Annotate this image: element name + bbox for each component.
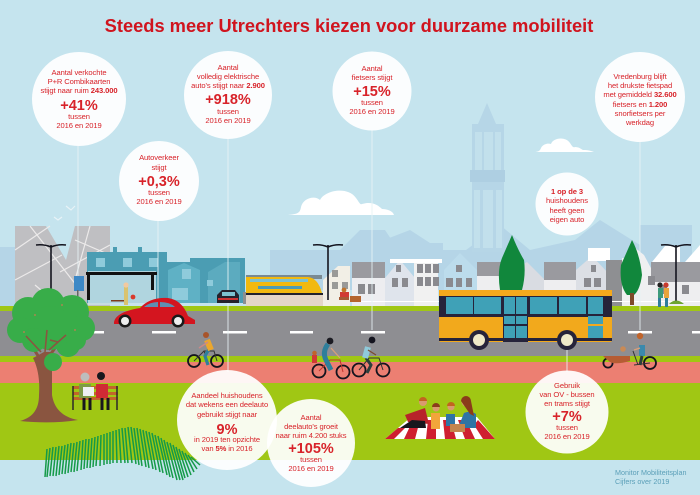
bubble: P+R: tussen — [68, 112, 90, 121]
people on right sidewalk — [657, 282, 669, 307]
bubble: Vredenburg: met gemiddeld 32.600 — [603, 90, 677, 99]
white and grey town houses — [323, 245, 700, 306]
trees behind road — [499, 235, 642, 305]
bubble: Vredenburg: Vredenburg blijft — [613, 72, 668, 81]
bubble: deelauto's: naar ruim 4.200 stuks — [276, 431, 347, 440]
bubble: P+R: stijgt naar ruim 243.000 — [41, 86, 117, 95]
bubble: 1 op de 3 — [536, 172, 598, 236]
bubble: 1 op de 3: huishoudens — [546, 196, 588, 205]
bubble: fietsers: Aantal — [362, 64, 383, 73]
bubble: autoverkeer: Autoverkeer — [139, 153, 179, 162]
title: Steeds meer Utrechters kiezen voor duurzame mobiliteit — [105, 15, 593, 36]
bubble: Vredenburg: het drukste fietspad — [608, 81, 672, 90]
bubble: Vredenburg: werkdag — [625, 118, 654, 127]
bubble: deelauto huishoudens: in 2019 ten opzichte — [194, 435, 260, 444]
cargo bike — [603, 333, 656, 369]
bubble: autoverkeer: stijgt — [151, 163, 167, 172]
bubble: elektrische auto's: volledig elektrische — [197, 72, 259, 81]
ground strip — [0, 306, 700, 311]
bubble: OV — [526, 370, 608, 454]
birds — [54, 206, 75, 220]
bubble: OV: Gebruik — [554, 381, 580, 390]
grey office blocks — [15, 226, 110, 306]
clouds — [288, 139, 594, 215]
footer note: Cijfers over 2019 — [615, 477, 669, 486]
bubble: elektrische auto's: auto's stijgt naar 2.900 — [191, 81, 265, 90]
bubble: deelauto huishoudens: gebruikt stijgt naar — [197, 410, 258, 419]
train — [246, 275, 324, 295]
street lamps — [36, 245, 691, 302]
bubble: autoverkeer: 2016 en 2019 — [136, 197, 182, 206]
bubble: 1 op de 3: heeft geen — [550, 206, 584, 215]
bubble: fietsers — [332, 52, 412, 130]
bubble: deelauto's: deelauto's groeit — [284, 422, 339, 431]
footer note — [615, 468, 687, 486]
bubble: elektrische auto's — [184, 51, 272, 139]
bubble: OV: tussen — [556, 423, 578, 432]
skyline: distant roofs — [0, 220, 692, 306]
bubble: deelauto's: tussen — [300, 455, 322, 464]
bubble: OV: en trams stijgt — [544, 399, 591, 408]
bubble: P+R: P+R Combikaarten — [48, 77, 110, 86]
bubble: Vredenburg: fietsers en 1.200 — [613, 100, 667, 109]
bubble: deelauto's: Aantal — [301, 413, 322, 422]
bus shelter — [74, 272, 157, 305]
bubble: P+R: 2016 en 2019 — [56, 121, 102, 130]
cyclist 3 — [352, 337, 390, 376]
big tree — [7, 288, 95, 422]
platform — [246, 295, 324, 306]
bubble: deelauto huishoudens: 9% — [217, 422, 238, 438]
bubble: deelauto's — [267, 399, 355, 487]
bubble: fietsers: +15% — [353, 84, 391, 100]
road — [0, 311, 700, 356]
bubble: fietsers: 2016 en 2019 — [349, 107, 395, 116]
bubble: deelauto huishoudens: dat wekens een deelauto — [186, 400, 268, 409]
cyclist 2: mother with child — [312, 338, 350, 378]
shrub — [669, 300, 684, 304]
bubble: fietsers: tussen — [361, 98, 383, 107]
skyline: Dom tower silhouette — [470, 103, 505, 252]
bubble: elektrische auto's: Aantal — [218, 63, 239, 72]
grass tuft — [45, 427, 200, 480]
lawn — [0, 383, 700, 460]
bubble: P+R: +41% — [60, 98, 98, 114]
footer note: Monitor Mobiliteitsplan — [615, 468, 687, 477]
bubble: OV: +7% — [552, 409, 582, 425]
red car — [114, 298, 195, 328]
bubble: deelauto huishoudens: van 5% in 2016 — [202, 444, 252, 453]
bubble: OV: 2016 en 2019 — [544, 432, 590, 441]
bench with people — [73, 372, 118, 410]
bubble: elektrische auto's: 2016 en 2019 — [205, 116, 251, 125]
picnic family on blanket — [385, 396, 495, 439]
cyclist 1 — [188, 332, 223, 367]
bubble: Vredenburg: snorfietsers per — [615, 109, 666, 118]
grass strip — [0, 356, 700, 362]
bubble: 1 op de 3: eigen auto — [550, 215, 584, 224]
bubble: fietsers: fietsers stijgt — [352, 73, 393, 82]
bubble: P+R — [32, 52, 126, 146]
bubble: autoverkeer: tussen — [148, 188, 170, 197]
bubble: autoverkeer: +0,3% — [138, 174, 180, 190]
bubble: deelauto huishoudens: Aandeel huishoudens — [191, 391, 263, 400]
parked dark car — [217, 290, 246, 304]
bubble: deelauto's: 2016 en 2019 — [288, 464, 334, 473]
bench person — [339, 288, 361, 302]
connector lines — [78, 130, 640, 372]
bubble: Vredenburg — [595, 52, 685, 142]
bubble: OV: van OV - bussen — [539, 390, 595, 399]
bubble: elektrische auto's: tussen — [217, 107, 239, 116]
bubble: deelauto huishoudens — [177, 370, 277, 470]
bus — [439, 290, 612, 350]
bubble: 1 op de 3: 1 op de 3 — [551, 187, 583, 196]
cycle path — [0, 362, 700, 383]
bubble: elektrische auto's: +918% — [205, 92, 251, 108]
bubble: autoverkeer — [119, 141, 199, 221]
teal station buildings — [87, 247, 245, 305]
bubble: deelauto's: +105% — [288, 441, 334, 457]
bubble: P+R: Aantal verkochte — [52, 68, 106, 77]
road markings — [88, 331, 700, 334]
